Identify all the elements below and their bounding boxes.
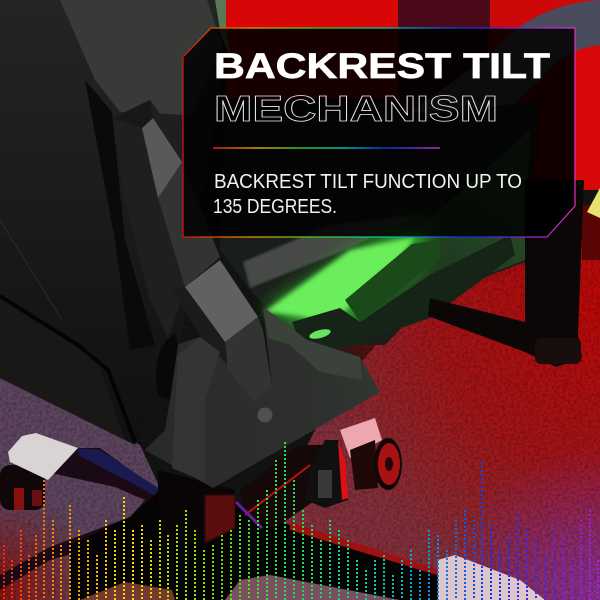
arm blue edge (78, 448, 158, 496)
hanging tag (305, 440, 348, 508)
panel background and rainbow border (183, 28, 575, 237)
purple rim (236, 502, 262, 528)
pivot screw (258, 408, 272, 422)
description: BACKREST TILT FUNCTION UP TO (214, 171, 522, 193)
red carpet glow (230, 240, 600, 600)
housing left band (172, 337, 220, 482)
left caster (0, 465, 45, 510)
rainbow divider (213, 147, 440, 149)
description: 135 DEGREES. (213, 196, 337, 218)
base star arm and column (0, 445, 440, 600)
upper arm light face (142, 118, 182, 198)
carpet floor (230, 255, 600, 600)
upper arm (113, 100, 220, 338)
right caster (340, 418, 402, 490)
central black base (70, 490, 440, 600)
light block (185, 260, 258, 342)
tilt mechanism (113, 100, 380, 488)
black disc behind housing (156, 333, 178, 400)
seat green shade (390, 130, 530, 320)
yellow light bit (587, 188, 600, 218)
lower arm (225, 317, 272, 402)
seat link arm (292, 235, 515, 347)
bright green mesh (264, 237, 415, 324)
seat mesh grey (243, 215, 420, 288)
equalizer dots (4, 442, 598, 600)
title line 1: BACKREST TILT (214, 47, 550, 86)
green glimpse in link (308, 327, 332, 341)
info panel (183, 28, 575, 237)
white base cap right (438, 555, 545, 600)
base red edge (290, 522, 440, 576)
green left highlight top (205, 0, 232, 60)
chair stem (428, 180, 584, 367)
column (158, 470, 235, 546)
backrest (0, 0, 225, 445)
tilt base housing (145, 307, 380, 488)
background wall top (226, 0, 600, 260)
arm top facet (113, 100, 153, 128)
column red reflection (205, 495, 235, 543)
left red floor glow (0, 490, 110, 600)
housing top facet (263, 307, 362, 380)
white base cap left (8, 433, 78, 480)
left purple floor (0, 378, 175, 600)
lower arm dark side (170, 287, 228, 370)
blue-grey seat edge top right (400, 0, 600, 160)
purple carpet glow (430, 430, 600, 600)
seat green glow (265, 215, 430, 335)
title line 2 outline: MECHANISM (214, 88, 498, 129)
carpet seen through base (80, 582, 175, 600)
dark green seat rail (345, 240, 440, 322)
upper arm mid (142, 128, 220, 287)
seat underside (220, 100, 540, 345)
right base arm (240, 445, 330, 528)
red rim (245, 465, 310, 515)
left arm (0, 448, 160, 590)
